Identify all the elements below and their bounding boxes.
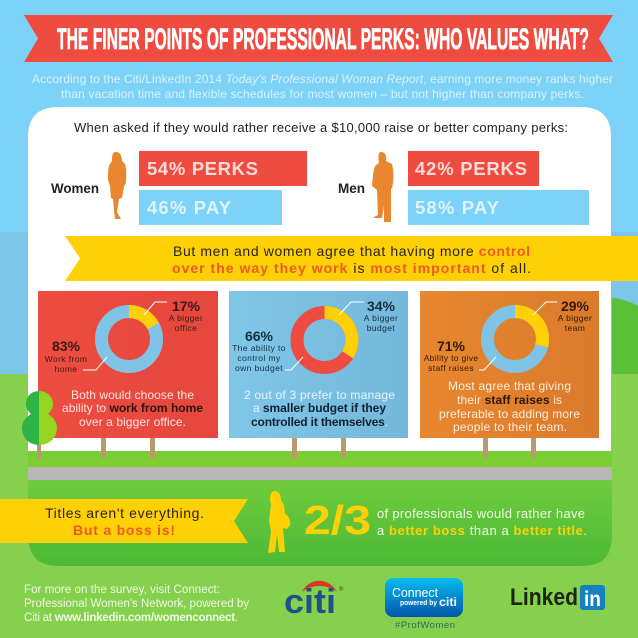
white card with green base <box>28 107 612 566</box>
icon: woman silhouette <box>108 152 126 219</box>
billboard posts <box>101 438 536 458</box>
stat description: a better boss than a better title. <box>377 523 587 538</box>
callout: 83%: home <box>55 364 77 374</box>
callout: 83%: 83% <box>52 338 81 354</box>
panel: women <box>51 151 307 225</box>
intro text <box>32 72 613 101</box>
title banner <box>24 15 613 62</box>
icon: tree <box>22 391 57 460</box>
panel: orange billboard, staff raises <box>420 291 599 438</box>
callout: 29% <box>533 298 592 333</box>
intro text: According to the Citi/LinkedIn 2014 Today's Professional Woman Report, earning more money ranks higher <box>32 72 613 86</box>
billboard text: over a bigger office. <box>79 415 186 429</box>
billboard text: preferable to adding more <box>439 407 580 421</box>
panel: blue billboard, control budget <box>229 291 408 438</box>
callout: 17%: office <box>175 323 197 333</box>
donut chart: 83 / 17 <box>102 312 156 366</box>
logo: citi: citi <box>284 583 336 621</box>
footer text: Professional Women's Network, powered by <box>24 598 249 610</box>
logo: linkedin: in <box>584 588 601 611</box>
callout: 71% <box>424 338 496 373</box>
callout: 71%: Ability to give <box>424 353 478 363</box>
icon: yellow woman silhouette <box>268 491 290 553</box>
logo: connect powered by citi: powered by <box>400 600 437 607</box>
women label: Women <box>51 180 99 196</box>
callout: 29%: A bigger <box>558 313 592 323</box>
callout: 71%: 71% <box>437 338 466 354</box>
callout: 17% <box>144 298 203 333</box>
logo: connect powered by citi <box>385 578 463 617</box>
billboard text: a smaller budget if they <box>253 401 386 415</box>
hashtag: #ProfWomen <box>395 620 455 631</box>
callout: 83% <box>45 338 107 374</box>
bar: 58% pay <box>408 190 589 225</box>
logo: connect powered by citi: citi <box>439 595 457 609</box>
icon: man silhouette <box>372 152 394 222</box>
bar: 58% pay: 58% PAY <box>415 197 500 218</box>
logo: citi: ® <box>339 586 344 593</box>
callout: 66%: own budget <box>235 363 283 373</box>
billboard text: Most agree that giving <box>448 379 571 393</box>
callout: 83%: Work from <box>45 354 87 364</box>
footer text <box>24 584 249 624</box>
control ribbon <box>65 236 638 281</box>
titles ribbon <box>0 499 248 543</box>
billboard text: ability to work from home <box>62 401 203 415</box>
stat description: of professionals would rather have <box>377 506 585 521</box>
titles ribbon: But a boss is! <box>73 522 175 538</box>
bar: 46% pay <box>139 190 282 225</box>
billboard text <box>62 388 203 429</box>
bar: 54% perks: 54% PERKS <box>147 158 258 179</box>
bar: 42% perks <box>408 151 539 186</box>
callout: 17%: 17% <box>172 298 201 314</box>
callout: 34%: A bigger <box>364 313 398 323</box>
stat description <box>377 506 587 538</box>
billboard text: 2 out of 3 prefer to manage <box>244 388 395 402</box>
titles ribbon: Titles aren't everything. <box>45 505 204 521</box>
callout: 34%: budget <box>367 323 395 333</box>
footer text: Citi at www.linkedin.com/womenconnect. <box>24 612 238 624</box>
callout: 66% <box>232 328 303 373</box>
billboard text: people to their team. <box>453 420 567 434</box>
bar: 54% perks <box>139 151 307 186</box>
panel: red billboard, work from home <box>38 291 218 438</box>
donut chart: 71 / 29 <box>488 312 542 366</box>
stat: 2/3: 2/3 <box>304 497 371 543</box>
bar: 46% pay: 46% PAY <box>147 197 232 218</box>
intro text: than vacation time and flexible schedules for most women – but not higher than company perks. <box>61 87 584 101</box>
callout: 29%: team <box>565 323 585 333</box>
control ribbon: But men and women agree that having more control <box>173 243 530 259</box>
callout: 17%: A bigger <box>169 313 203 323</box>
panel: men <box>338 151 589 225</box>
callout: 29%: 29% <box>561 298 590 314</box>
footer text: For more on the survey, visit Connect: <box>24 584 220 596</box>
logo: connect powered by citi: Connect <box>392 585 438 600</box>
billboard text: Both would choose the <box>71 388 194 402</box>
billboard text <box>244 388 395 429</box>
callout: 66%: control my <box>237 353 281 363</box>
control ribbon: over the way they work is most important of all. <box>172 260 531 276</box>
bar: 42% perks: 42% PERKS <box>415 158 527 179</box>
callout: 34% <box>339 298 398 333</box>
billboard text: their staff raises is <box>457 393 562 407</box>
men label: Men <box>338 180 365 196</box>
donut chart: 66 / 34 <box>297 312 352 368</box>
billboard text: controlled it themselves. <box>251 415 388 429</box>
logo: linkedin: Linked <box>510 584 578 611</box>
callout: 66%: 66% <box>245 328 274 344</box>
callout: 71%: staff raises <box>428 363 474 373</box>
billboard text <box>439 379 580 434</box>
callout: 34%: 34% <box>367 298 396 314</box>
callout: 66%: The ability to <box>232 343 286 353</box>
survey question: When asked if they would rather receive a $10,000 raise or better company perks: <box>74 120 568 135</box>
